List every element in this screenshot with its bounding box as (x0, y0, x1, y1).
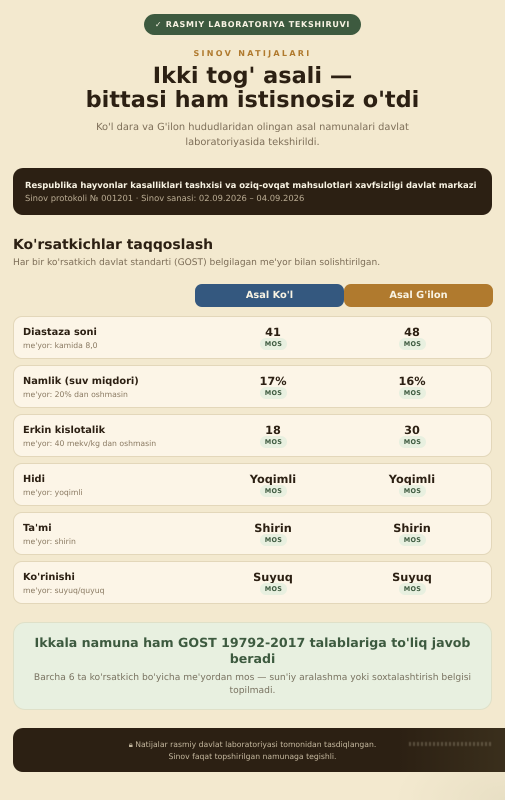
footer text: 🔒︎ Natijalar rasmiy davlat laboratoriyasi tomonidan tasdiqlangan. (129, 740, 376, 748)
row: Ta'mi: Shirin (393, 522, 431, 534)
row: Ta'mi: me'yor: shirin (23, 536, 76, 546)
row: Ko'rinishi: MOS (404, 585, 421, 593)
section heading: Ko'rsatkichlar taqqoslash (13, 236, 213, 252)
row: Ta'mi: Ta'mi (23, 523, 52, 534)
row: Namlik: me'yor: 20% dan oshmasin (23, 390, 128, 398)
row: Ta'mi: Shirin (254, 522, 292, 534)
blurred footer mark (409, 742, 493, 746)
column header: Asal G'ilon: Asal G'ilon (389, 290, 448, 301)
row: Erkin kislotalik: MOS (265, 438, 282, 446)
row: Diastaza soni: Diastaza soni (23, 327, 97, 338)
badge: official laboratory test (144, 14, 361, 35)
row: Diastaza soni: MOS (404, 340, 421, 348)
row: Ko'rinishi: Suyuq (392, 570, 432, 584)
row: Erkin kislotalik: me'yor: 40 mekv/kg dan oshmasin (23, 438, 156, 448)
row: Ko'rinishi: Suyuq (253, 570, 293, 584)
row: Diastaza soni: 41 (265, 326, 281, 338)
row: Hidi: Hidi (23, 474, 45, 485)
laboratory name: Respublika hayvonlar kasalliklari tashxisi va oziq-ovqat mahsulotlari xavfsizligi davlat markazi (25, 180, 477, 190)
row: Hidi: Yoqimli (250, 472, 296, 486)
row: Erkin kislotalik: Erkin kislotalik (23, 425, 105, 436)
title: Ikki tog' asali — (153, 63, 352, 89)
protocol details: Sinov protokoli № 001201 · Sinov sanasi: 02.09.2026 – 04.09.2026 (25, 193, 304, 203)
conclusion heading: beradi (230, 650, 275, 666)
row: Erkin kislotalik: 18 (265, 424, 281, 436)
row: Erkin kislotalik: MOS (404, 438, 421, 446)
panel: footer note (13, 728, 505, 772)
row: Namlik: MOS (404, 389, 421, 397)
column header: Asal G'ilon (344, 284, 493, 307)
row: Hidi: MOS (404, 487, 421, 495)
row: Namlik: 17% (259, 374, 287, 388)
row: Namlik: Namlik (suv miqdori) (23, 376, 139, 387)
row: Namlik: 16% (398, 374, 426, 388)
row: Ko'rinishi: Ko'rinishi (23, 572, 75, 583)
subtitle: laboratoriyasida tekshirildi. (185, 136, 320, 148)
conclusion text: topilmadi. (230, 685, 275, 696)
column header: Asal Ko'l: Asal Ko'l (246, 290, 293, 301)
eyebrow label: SINOV NATIJALARI (193, 48, 312, 58)
row: Hidi: me'yor: yoqimli (23, 488, 83, 496)
conclusion heading: Ikkala namuna ham GOST 19792-2017 talablariga to'liq javob (35, 635, 470, 650)
row: Diastaza soni: 48 (404, 326, 420, 338)
row: Ko'rinishi (13, 561, 492, 604)
row: Ta'mi (13, 512, 492, 555)
conclusion text: Barcha 6 ta ko'rsatkich bo'yicha me'yordan mos — sun'iy aralashma yoki soxtalashtirish belgisi (34, 672, 471, 682)
row: Hidi: Yoqimli (389, 472, 435, 486)
row: Ta'mi: MOS (404, 536, 421, 544)
row: Erkin kislotalik (13, 414, 492, 457)
section description: Har bir ko'rsatkich davlat standarti (GOST) belgilagan me'yor bilan solishtirilgan. (13, 258, 380, 268)
footer text (129, 740, 376, 761)
badge: official laboratory test: ✓ RASMIY LABORATORIYA TEKSHIRUVI (155, 20, 350, 29)
row: Hidi: MOS (265, 487, 282, 495)
column header: Asal Ko'l (195, 284, 344, 307)
row: Ko'rinishi: MOS (265, 585, 282, 593)
row: Namlik (13, 365, 492, 408)
row: Diastaza soni (13, 316, 492, 359)
row: Diastaza soni: me'yor: kamida 8,0 (23, 340, 98, 350)
row: Namlik: MOS (265, 389, 282, 397)
conclusion heading (35, 635, 470, 666)
panel: conclusion (13, 622, 492, 710)
row: Erkin kislotalik: 30 (404, 424, 420, 436)
row: Diastaza soni: MOS (265, 340, 282, 348)
title (86, 63, 419, 113)
row: Ko'rinishi: me'yor: suyuq/quyuq (23, 586, 104, 594)
subtitle (96, 122, 409, 148)
panel: laboratory info (13, 168, 492, 215)
row: Ta'mi: MOS (265, 536, 282, 544)
title: bittasi ham istisnosiz o'tdi (86, 87, 419, 113)
subtitle: Ko'l dara va G'ilon hududlaridan olingan asal namunalari davlat (96, 122, 409, 133)
footer text: Sinov faqat topshirilgan namunaga tegishli. (169, 752, 336, 760)
conclusion text (34, 672, 471, 696)
row: Hidi (13, 463, 492, 506)
